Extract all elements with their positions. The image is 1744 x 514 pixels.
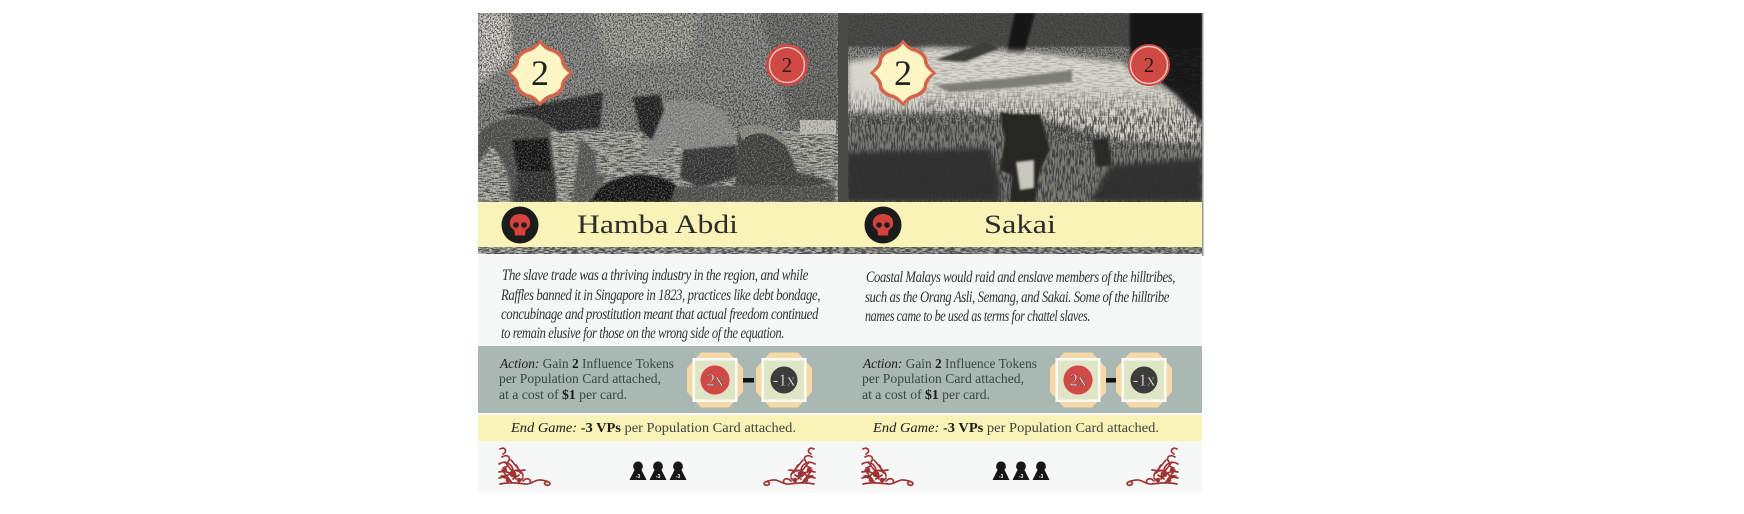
action text	[499, 356, 674, 402]
flavour text: Coastal Malays would raid and enslave members of the hilltribes,	[866, 269, 1175, 286]
pawn icons: -3	[676, 474, 680, 480]
cost diamond	[506, 40, 574, 106]
pawn icons: -3	[999, 474, 1003, 480]
end game text: End Game: -3 VPs per Population Card attached.	[872, 420, 1159, 435]
card title: Sakai	[984, 210, 1056, 239]
ornament left	[862, 448, 913, 485]
red influence circle: 2	[782, 53, 792, 77]
flavour text: to remain elusive for those on the wrong side of the equation.	[501, 325, 784, 342]
action text: Action: Gain 2 Influence Tokens	[499, 356, 674, 371]
token: -1x coin: -1x	[1133, 370, 1156, 390]
card: Hamba Abdi	[478, 13, 838, 493]
flavour text	[865, 269, 1175, 325]
token: 2x influence	[687, 352, 743, 408]
text panel	[478, 254, 838, 345]
action text: at a cost of $1 per card.	[499, 387, 627, 402]
footer panel	[478, 441, 838, 493]
action text	[862, 356, 1037, 402]
action text: per Population Card attached,	[862, 371, 1024, 386]
action band	[478, 346, 838, 413]
token: -1x coin: -1x	[773, 370, 796, 390]
cost diamond	[870, 40, 936, 106]
pawn icons: -3	[1019, 474, 1023, 480]
card: Sakai	[838, 13, 1204, 493]
red influence circle	[1128, 44, 1170, 86]
action text: per Population Card attached,	[499, 371, 661, 386]
minus dash	[743, 378, 754, 382]
text panel	[838, 254, 1202, 345]
skull icon	[502, 206, 538, 244]
minus dash	[1106, 378, 1117, 382]
action text: Action: Gain 2 Influence Tokens	[862, 356, 1037, 371]
illustration: jungle hunter engraving	[838, 13, 1202, 255]
pawn icons: -3	[656, 474, 660, 480]
flavour text: names came to be used as terms for chattel slaves.	[865, 308, 1090, 325]
action band	[838, 346, 1202, 413]
end game band	[838, 415, 1202, 442]
pawn icons: -3	[1039, 474, 1043, 480]
cost diamond: 2	[531, 53, 549, 93]
skull icon	[864, 206, 902, 244]
ornament right	[764, 448, 815, 485]
flavour text: such as the Orang Asli, Semang, and Sakai. Some of the hilltribe	[865, 289, 1169, 306]
token: 2x influence: 2x	[706, 370, 724, 390]
flavour text: The slave trade was a thriving industry in the region, and while	[502, 267, 808, 284]
end game text: End Game: -3 VPs per Population Card attached.	[510, 420, 796, 435]
right edge line	[1202, 13, 1204, 256]
cost diamond: 2	[894, 53, 912, 93]
token: -1x coin	[756, 352, 812, 408]
illustration: slaves in water engraving	[478, 13, 838, 255]
title banner	[478, 202, 838, 247]
pawn icons	[992, 462, 1050, 480]
red influence circle	[766, 44, 808, 86]
token: 2x influence: 2x	[1070, 370, 1087, 390]
footer panel	[838, 441, 1202, 493]
token: 2x influence	[1050, 352, 1106, 408]
flavour text	[500, 267, 820, 342]
action text: at a cost of $1 per card.	[862, 387, 990, 402]
title banner	[838, 202, 1202, 247]
red influence circle: 2	[1144, 53, 1154, 77]
ornament left	[499, 448, 550, 485]
pawn icons	[630, 462, 686, 480]
card title: Hamba Abdi	[577, 210, 738, 239]
flavour text: Raffles banned it in Singapore in 1823, practices like debt bondage,	[500, 287, 820, 304]
end game band	[478, 415, 838, 442]
flavour text: concubinage and prostitution meant that actual freedom continued	[501, 306, 819, 323]
ornament right	[1127, 448, 1178, 485]
token: -1x coin	[1116, 352, 1172, 408]
pawn icons: -3	[636, 474, 640, 480]
